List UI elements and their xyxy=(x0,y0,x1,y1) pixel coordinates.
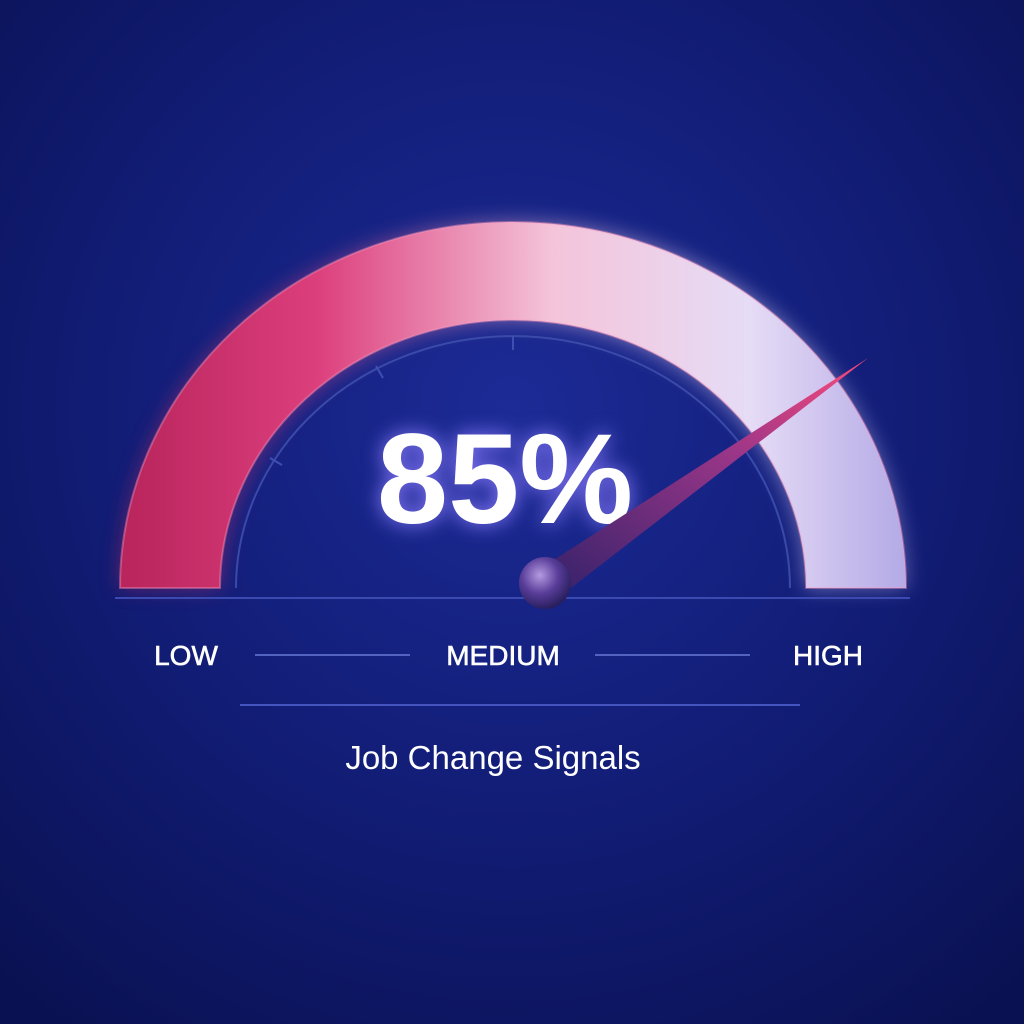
inner dial xyxy=(236,336,790,588)
value 85%: 85% xyxy=(377,408,633,551)
gauge xyxy=(115,222,910,598)
needle xyxy=(519,358,868,609)
needle knob xyxy=(519,557,571,609)
subtitle: Job Change Signals xyxy=(345,739,641,776)
scale labels: LOW xyxy=(154,640,218,671)
scale labels: MEDIUM xyxy=(446,640,560,671)
scale labels xyxy=(154,640,863,671)
gauge band xyxy=(120,222,906,588)
scale labels: HIGH xyxy=(793,640,863,671)
